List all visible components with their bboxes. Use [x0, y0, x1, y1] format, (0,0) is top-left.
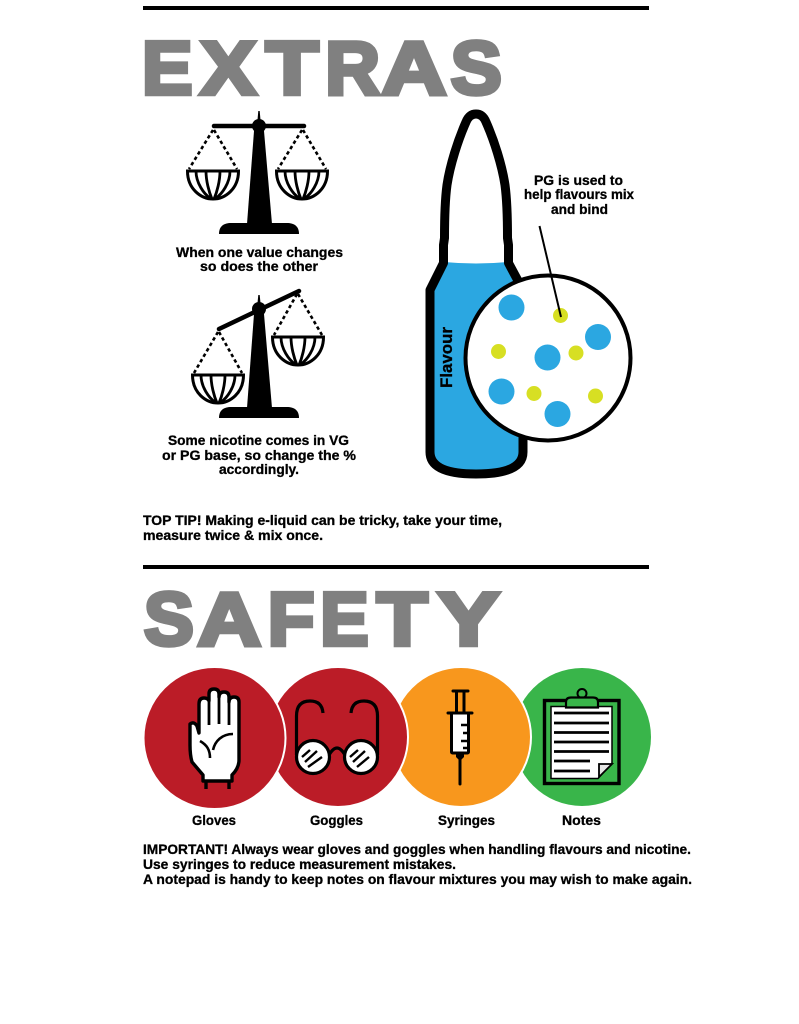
top tip: measure twice & mix once.	[143, 528, 323, 543]
bottle outline	[430, 114, 523, 474]
caption: tipped scales: Some nicotine comes in VG	[168, 433, 349, 448]
circle: syringes	[391, 667, 531, 807]
heading: EXTRAS: A	[382, 26, 446, 110]
icon: clipboard	[544, 689, 619, 784]
heading: SAFETY	[144, 577, 499, 662]
flavour particles	[488, 294, 611, 427]
bottle illustration	[430, 114, 523, 474]
magnified circle	[466, 276, 630, 440]
bottle liquid	[430, 262, 523, 474]
caption: balanced scales	[176, 245, 343, 274]
icon labels: Syringes	[438, 813, 495, 828]
heading: SAFETY: Y	[438, 577, 499, 661]
callout: PG: help flavours mix	[524, 187, 634, 202]
heading: SAFETY: A	[198, 578, 261, 662]
bottle label: Flavour	[437, 327, 456, 388]
caption: tipped scales	[162, 433, 356, 477]
icon labels	[192, 813, 601, 828]
circle: notes	[513, 668, 651, 806]
top rule	[143, 6, 649, 10]
icon: balanced scales	[188, 111, 328, 234]
icon labels: Goggles	[310, 813, 363, 828]
icon: syringe	[448, 691, 472, 784]
heading: EXTRAS: E	[142, 26, 193, 110]
heading: EXTRAS: S	[451, 27, 502, 111]
icon labels: Notes	[562, 813, 601, 828]
icon: goggles	[296, 701, 378, 774]
caption: tipped scales: accordingly.	[219, 462, 299, 477]
important note: IMPORTANT! Always wear gloves and goggles when handling flavours and nicotine.	[143, 842, 691, 857]
callout pointer line	[540, 226, 561, 317]
heading: EXTRAS: R	[325, 26, 380, 110]
important note: Use syringes to reduce measurement mistakes.	[143, 857, 456, 872]
icon: tipped scales	[192, 291, 324, 418]
heading: EXTRAS	[142, 26, 502, 111]
caption: balanced scales: so does the other	[200, 259, 319, 274]
top tip: TOP TIP! Making e-liquid can be tricky, take your time,	[143, 513, 502, 528]
heading: EXTRAS: X	[200, 26, 256, 110]
heading: SAFETY: S	[144, 577, 194, 661]
circle: gloves	[144, 667, 286, 809]
PG particles	[491, 308, 603, 404]
caption: tipped scales: or PG base, so change the %	[162, 448, 356, 463]
second rule	[143, 565, 649, 569]
icon labels: Gloves	[192, 813, 236, 828]
callout: PG: PG is used to	[534, 173, 623, 188]
callout: PG: and bind	[551, 202, 608, 217]
important note	[143, 842, 692, 887]
callout: PG	[524, 173, 634, 217]
caption: balanced scales: When one value changes	[176, 245, 343, 260]
top tip	[143, 513, 502, 543]
heading: SAFETY: F	[268, 578, 315, 662]
heading: EXTRAS: T	[266, 27, 318, 111]
icon: glove	[190, 689, 239, 789]
circle: goggles	[268, 667, 408, 807]
important note: A notepad is handy to keep notes on flavour mixtures you may wish to make again.	[143, 872, 692, 887]
heading: SAFETY: T	[377, 577, 428, 661]
heading: SAFETY: E	[320, 577, 369, 661]
